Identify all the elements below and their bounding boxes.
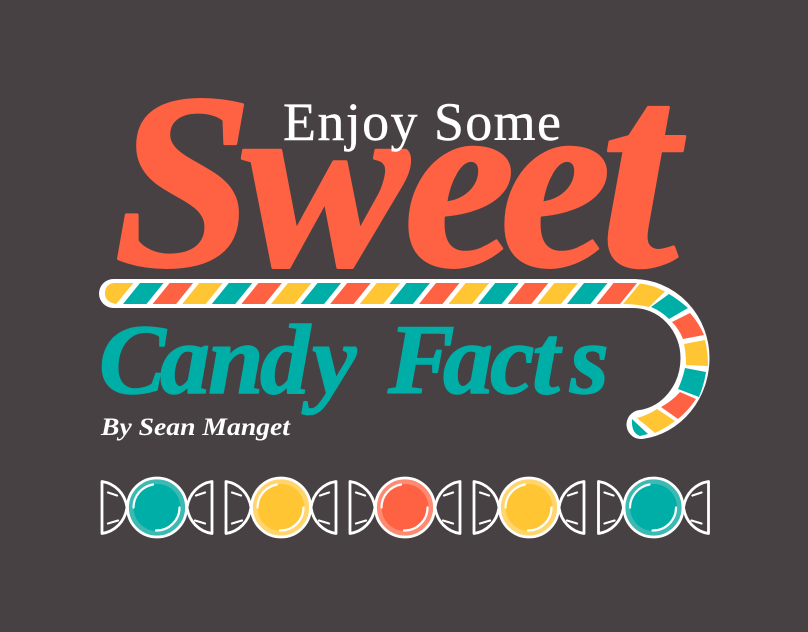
- candy cane divider: [105, 283, 708, 436]
- title line: Enjoy Some: Enjoy Some: [283, 92, 561, 152]
- candy row: [102, 478, 708, 537]
- icon: teal candy: [598, 478, 708, 537]
- byline: By Sean Manget: [100, 414, 291, 441]
- icon: teal candy: [102, 478, 212, 537]
- icon: red candy: [350, 478, 460, 537]
- title word: Sweet: Swee: [114, 43, 611, 320]
- title word: Sweet: t: [600, 15, 688, 326]
- title line: Candy Facts: Candy Facts: [99, 304, 609, 415]
- icon: yellow candy: [474, 478, 584, 537]
- icon: yellow candy: [226, 478, 336, 537]
